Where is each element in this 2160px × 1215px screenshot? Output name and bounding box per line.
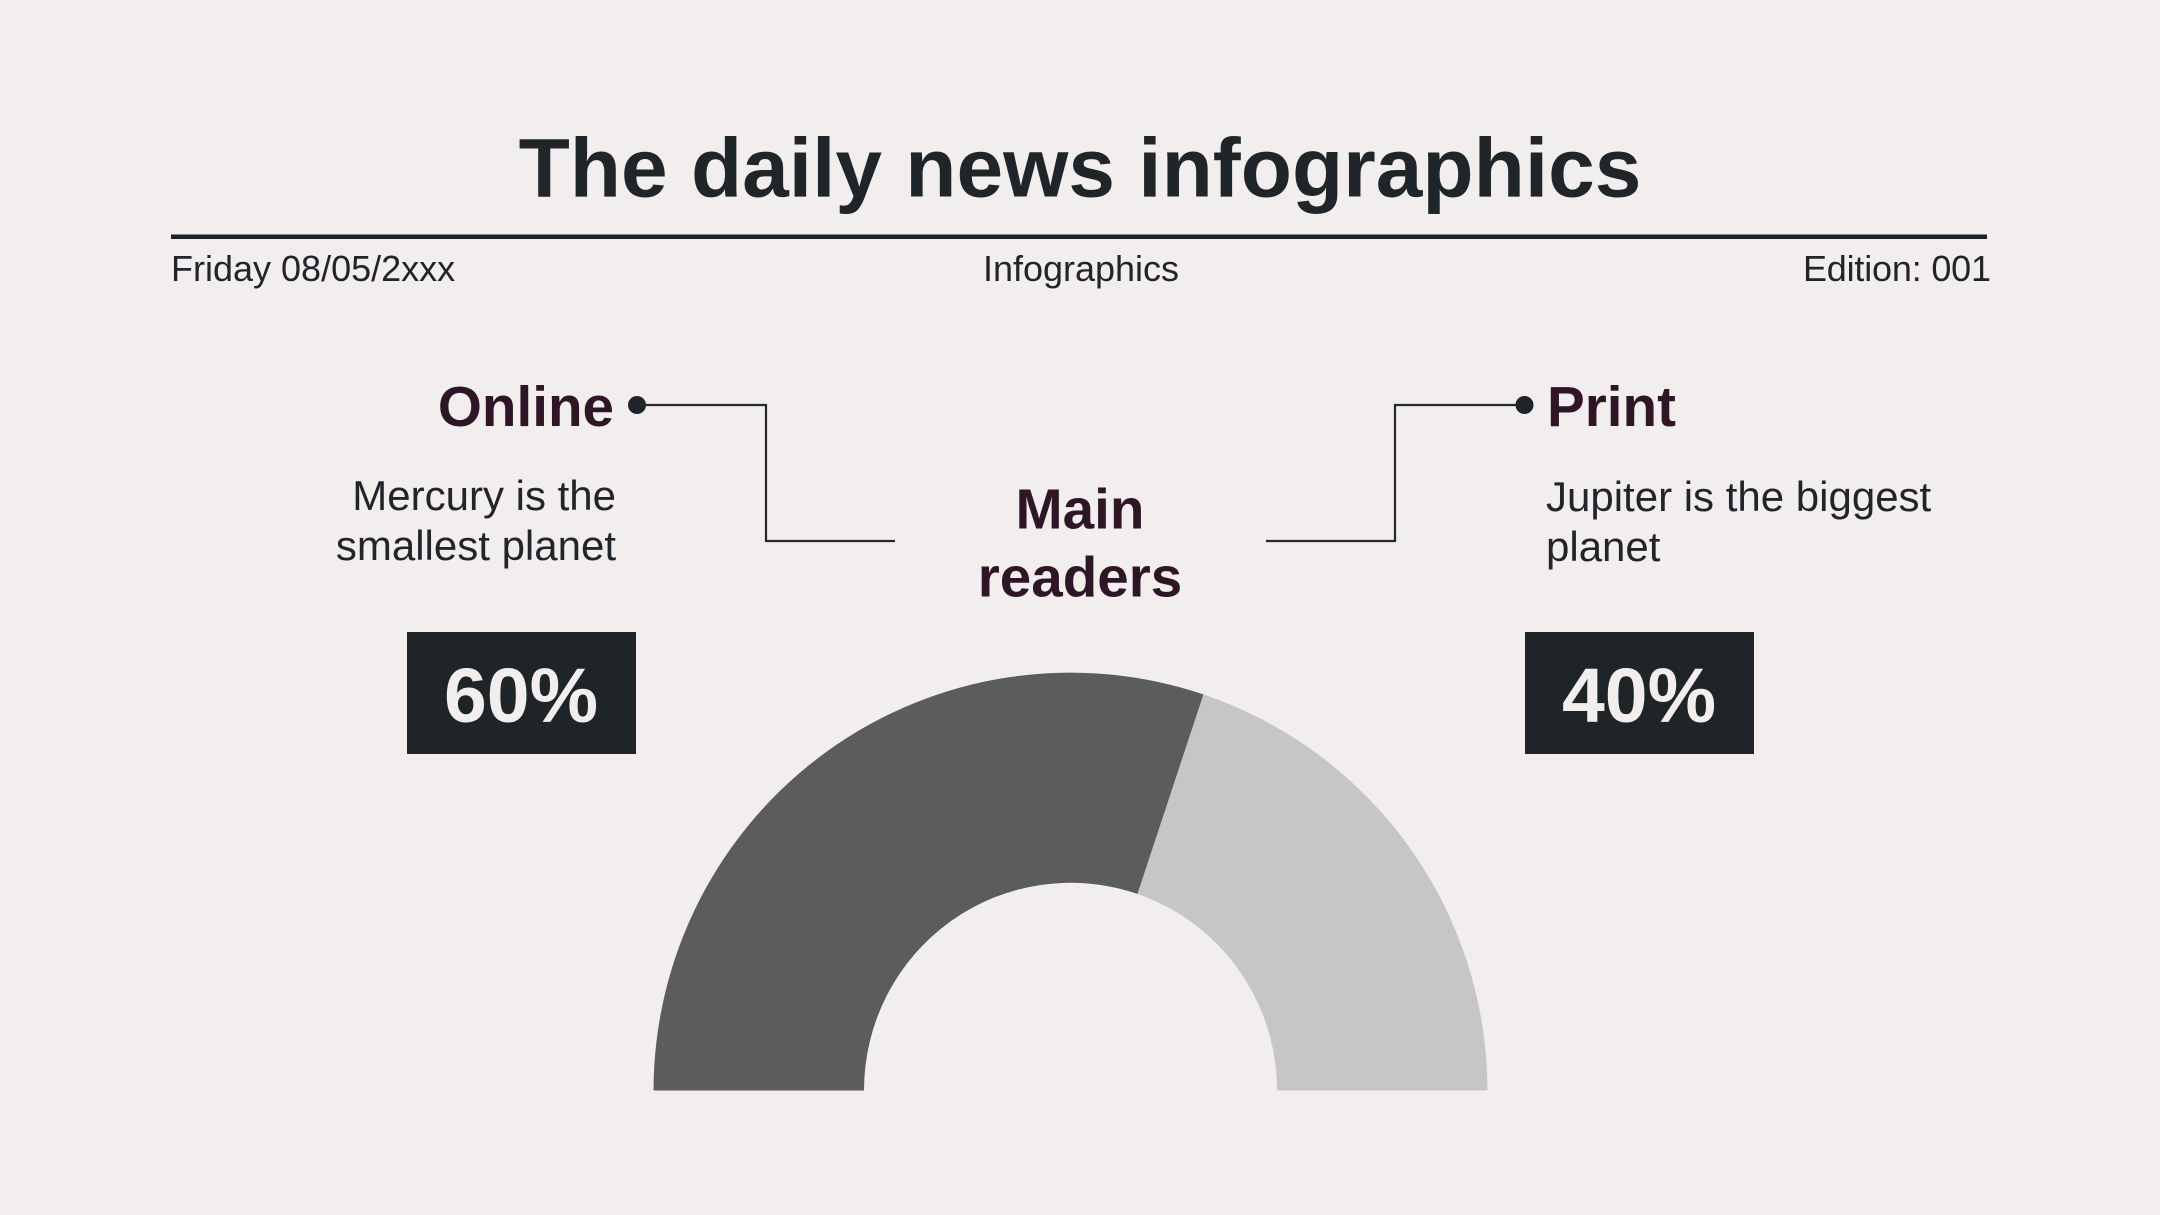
section name: Infographics — [983, 248, 1179, 289]
online percentage box: 60% — [444, 653, 598, 739]
edition: Edition: 001 — [1803, 248, 1991, 289]
panel: print — [1525, 375, 1932, 754]
print heading: Print — [1547, 375, 1676, 438]
segment: print 40% — [1138, 694, 1488, 1090]
print description: Jupiter is the biggest — [1546, 473, 1932, 520]
title: The daily news infographics — [519, 120, 1641, 214]
connector: print to main readers — [1266, 396, 1534, 541]
connector: online to main readers — [628, 396, 895, 541]
print description: planet — [1546, 523, 1661, 570]
online description: smallest planet — [336, 522, 616, 569]
online percentage box — [407, 632, 636, 754]
print percentage box — [1525, 632, 1754, 754]
date: Friday 08/05/2xxx — [171, 248, 455, 289]
segment: online 60% — [654, 673, 1204, 1090]
central label: readers — [978, 546, 1182, 608]
central label: Main — [1016, 478, 1144, 540]
print percentage box: 40% — [1562, 653, 1716, 739]
header meta row — [171, 248, 1991, 289]
panel: online — [336, 375, 636, 754]
online description: Mercury is the — [352, 472, 616, 519]
half-donut chart — [654, 673, 1488, 1090]
header rule — [171, 234, 1987, 239]
online heading: Online — [438, 375, 614, 438]
